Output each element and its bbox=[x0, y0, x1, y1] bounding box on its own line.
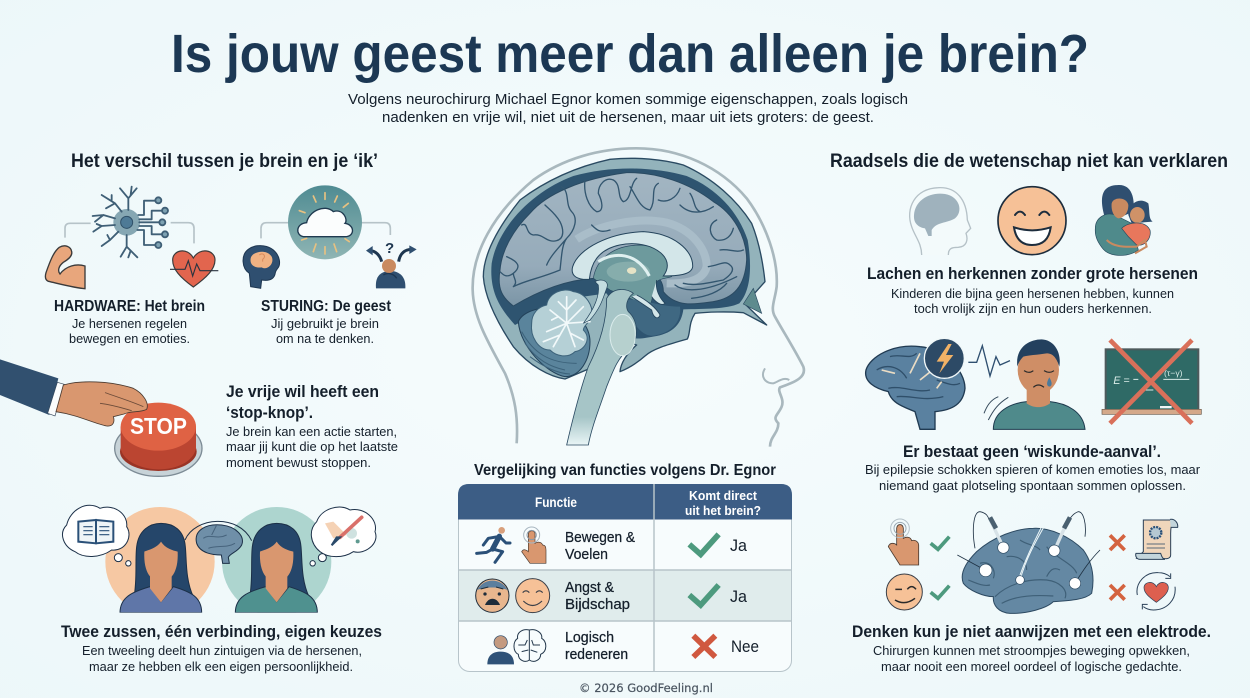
table row: logisch: Logisch bbox=[565, 630, 614, 646]
icon: head with question bbox=[243, 246, 280, 288]
icon: parent and child bbox=[1095, 185, 1153, 255]
table row: angst: Ja bbox=[730, 587, 748, 606]
gyri bbox=[500, 178, 743, 298]
panel: raadsels bbox=[830, 151, 1228, 674]
icon: scared face bbox=[476, 579, 509, 612]
table row: bewegen: Bewegen & bbox=[565, 530, 635, 546]
text: tweeling: maar ze hebben elk een eigen persoonlijkheid. bbox=[89, 659, 353, 674]
figure: left sister bbox=[120, 523, 202, 613]
icon: heart with pulse bbox=[170, 251, 218, 287]
table header text: Komt direct bbox=[689, 488, 758, 503]
panel: tweeling bbox=[61, 505, 382, 674]
icon: scroll with gear bbox=[1136, 519, 1178, 559]
icons: elektrode bbox=[886, 512, 1178, 613]
subtitle bbox=[348, 91, 908, 126]
icon: connecting brain bbox=[185, 521, 252, 563]
icon group: hardware bbox=[45, 187, 218, 289]
thalamus bbox=[593, 245, 673, 307]
table row: logisch: Nee bbox=[731, 637, 759, 656]
icon: thought bubble book bbox=[63, 505, 131, 566]
icon: hand on stop button: STOP bbox=[130, 413, 187, 439]
icon: crying person bbox=[984, 339, 1085, 429]
cerebrum bbox=[499, 173, 747, 306]
icon group: sturing bbox=[243, 185, 417, 288]
text: lachen: Lachen en herkennen zonder grote hersenen bbox=[867, 264, 1198, 283]
icon: outline brain bbox=[514, 630, 546, 661]
icon: brain with electrodes bbox=[957, 512, 1100, 613]
corpus callosum bbox=[572, 232, 693, 279]
icon: pulse bbox=[968, 346, 1010, 376]
text: hardware bbox=[54, 298, 205, 346]
table heading: Vergelijking van functies volgens Dr. Egnor bbox=[474, 462, 776, 479]
heading: verschil: Het verschil tussen je brein en je ‘ik’ bbox=[71, 151, 378, 172]
text: elektrode bbox=[852, 622, 1211, 674]
subtitle: Volgens neurochirurg Michael Egnor komen sommige eigenschappen, zoals logisch bbox=[348, 91, 908, 108]
text: hardware: HARDWARE: Het brein bbox=[54, 298, 205, 315]
text: wiskunde bbox=[865, 442, 1201, 493]
icon: person with choices bbox=[366, 245, 417, 288]
illustration: twin sisters bbox=[63, 505, 376, 616]
table row: logisch: redeneren bbox=[565, 647, 628, 663]
icon: check bbox=[931, 586, 949, 598]
table frame bbox=[458, 484, 792, 672]
title: Is jouw geest meer dan alleen je brein? bbox=[171, 24, 1089, 84]
icon: happy face bbox=[516, 579, 550, 613]
heading: raadsels: Raadsels die de wetenschap niet kan verklaren bbox=[830, 151, 1228, 172]
icon: person bbox=[487, 636, 514, 664]
table row: angst: Angst & bbox=[565, 580, 614, 596]
text: elektrode: maar nooit een moreel oordeel of logische gedachte. bbox=[881, 659, 1182, 674]
white matter band bbox=[577, 221, 707, 283]
text: lachen bbox=[867, 264, 1198, 316]
text: wiskunde: Bij epilepsie schokken spieren of komen emoties los, maar bbox=[865, 462, 1201, 477]
text: tweeling: Een tweeling deelt hun zintuigen via de hersenen, bbox=[82, 643, 362, 658]
text: lachen: Kinderen die bijna geen hersenen hebben, kunnen bbox=[891, 286, 1174, 301]
skull layer bbox=[483, 158, 767, 379]
text: hardware: Je hersenen regelen bbox=[72, 316, 187, 331]
text: tweeling bbox=[61, 622, 382, 674]
panel: verschil brein en ik bbox=[45, 151, 417, 346]
text: stop-knop: ‘stop-knop’. bbox=[226, 403, 313, 422]
icon: laughing face bbox=[998, 187, 1066, 255]
ventral region bbox=[627, 299, 680, 336]
figure: right sister bbox=[235, 523, 317, 613]
icon: cross bbox=[1110, 535, 1125, 550]
icon: check bbox=[689, 585, 719, 605]
icon: check bbox=[689, 534, 719, 554]
text: wiskunde: niemand gaat plotseling spontaan sommen oplossen. bbox=[879, 478, 1186, 493]
dura dark layer bbox=[491, 168, 750, 339]
text: lachen: toch vrolijk zijn en hun ouders herkennen. bbox=[914, 301, 1152, 316]
text: stop-knop: Je brein kan een actie starten, bbox=[226, 424, 397, 439]
text: tweeling: Twee zussen, één verbinding, eigen keuzes bbox=[61, 622, 382, 641]
illustration: central brain cross-section bbox=[473, 148, 804, 447]
text: sturing bbox=[261, 298, 391, 346]
text: wiskunde: Er bestaat geen ‘wiskunde-aanval’. bbox=[903, 442, 1161, 461]
icon: cross bbox=[1110, 585, 1125, 600]
text: elektrode: Chirurgen kunnen met stroompjes beweging opwekken, bbox=[873, 643, 1190, 658]
icon: brain with lightning bbox=[866, 338, 965, 429]
icon: neuron bbox=[93, 187, 168, 257]
icon: muscle arm bbox=[45, 246, 85, 289]
icon: hand on stop button bbox=[0, 359, 202, 476]
subtitle: nadenken en vrije wil, niet uit de hersenen, maar uit iets groters: de geest. bbox=[382, 109, 874, 126]
table header text bbox=[535, 488, 761, 518]
label: question mark: ? bbox=[385, 240, 394, 257]
table header text: Functie bbox=[535, 495, 577, 510]
text: elektrode: Denken kun je niet aanwijzen met een elektrode. bbox=[852, 622, 1211, 641]
icon: thought bubble paintbrush bbox=[310, 507, 376, 566]
table row: angst bbox=[476, 579, 748, 613]
icon: winking face bbox=[886, 574, 922, 610]
icons: lachen bbox=[910, 185, 1153, 255]
icons: epilepsie bbox=[866, 338, 1201, 429]
icon: heart cycle bbox=[1137, 573, 1175, 610]
panel: vergelijkingstabel bbox=[458, 462, 792, 672]
text: stop-knop: maar jij kunt die op het laatste bbox=[226, 439, 398, 454]
table row: logisch bbox=[487, 630, 759, 664]
icon: crossed out blackboard bbox=[1102, 340, 1201, 423]
text: stop-knop: Je vrije wil heeft een bbox=[226, 382, 379, 401]
icon: check bbox=[931, 537, 949, 549]
table header text: uit het brein? bbox=[685, 503, 761, 518]
copyright: © 2026 GoodFeeling.nl bbox=[579, 681, 713, 695]
icon: cloud in sun circle bbox=[288, 185, 362, 259]
icon: crossed out blackboard: (τ−γ) bbox=[1164, 368, 1183, 378]
icon: cross bbox=[693, 636, 715, 657]
head outline bbox=[473, 148, 804, 447]
text: hardware: bewegen en emoties. bbox=[69, 331, 190, 346]
cerebellum bbox=[518, 290, 592, 377]
table row: bewegen bbox=[477, 527, 748, 563]
text: sturing: STURING: De geest bbox=[261, 298, 391, 315]
brainstem bbox=[567, 290, 636, 445]
icon: runner bbox=[477, 527, 510, 562]
icon: child head with small brain bbox=[910, 188, 971, 255]
text: stop-knop bbox=[226, 382, 398, 470]
text: sturing: Jij gebruikt je brein bbox=[271, 316, 379, 331]
table row: bewegen: Voelen bbox=[565, 547, 608, 563]
table row: bewegen: Ja bbox=[730, 536, 748, 555]
table row: angst: Bijdschap bbox=[565, 597, 630, 613]
text: sturing: om na te denken. bbox=[276, 331, 374, 346]
icon: crossed out blackboard: E = bbox=[1113, 375, 1130, 387]
icon: touch hand bbox=[522, 527, 546, 563]
panel: stop-knop bbox=[0, 359, 398, 476]
text: stop-knop: moment bewust stoppen. bbox=[226, 455, 371, 470]
icon: pointing hand bbox=[888, 519, 919, 565]
